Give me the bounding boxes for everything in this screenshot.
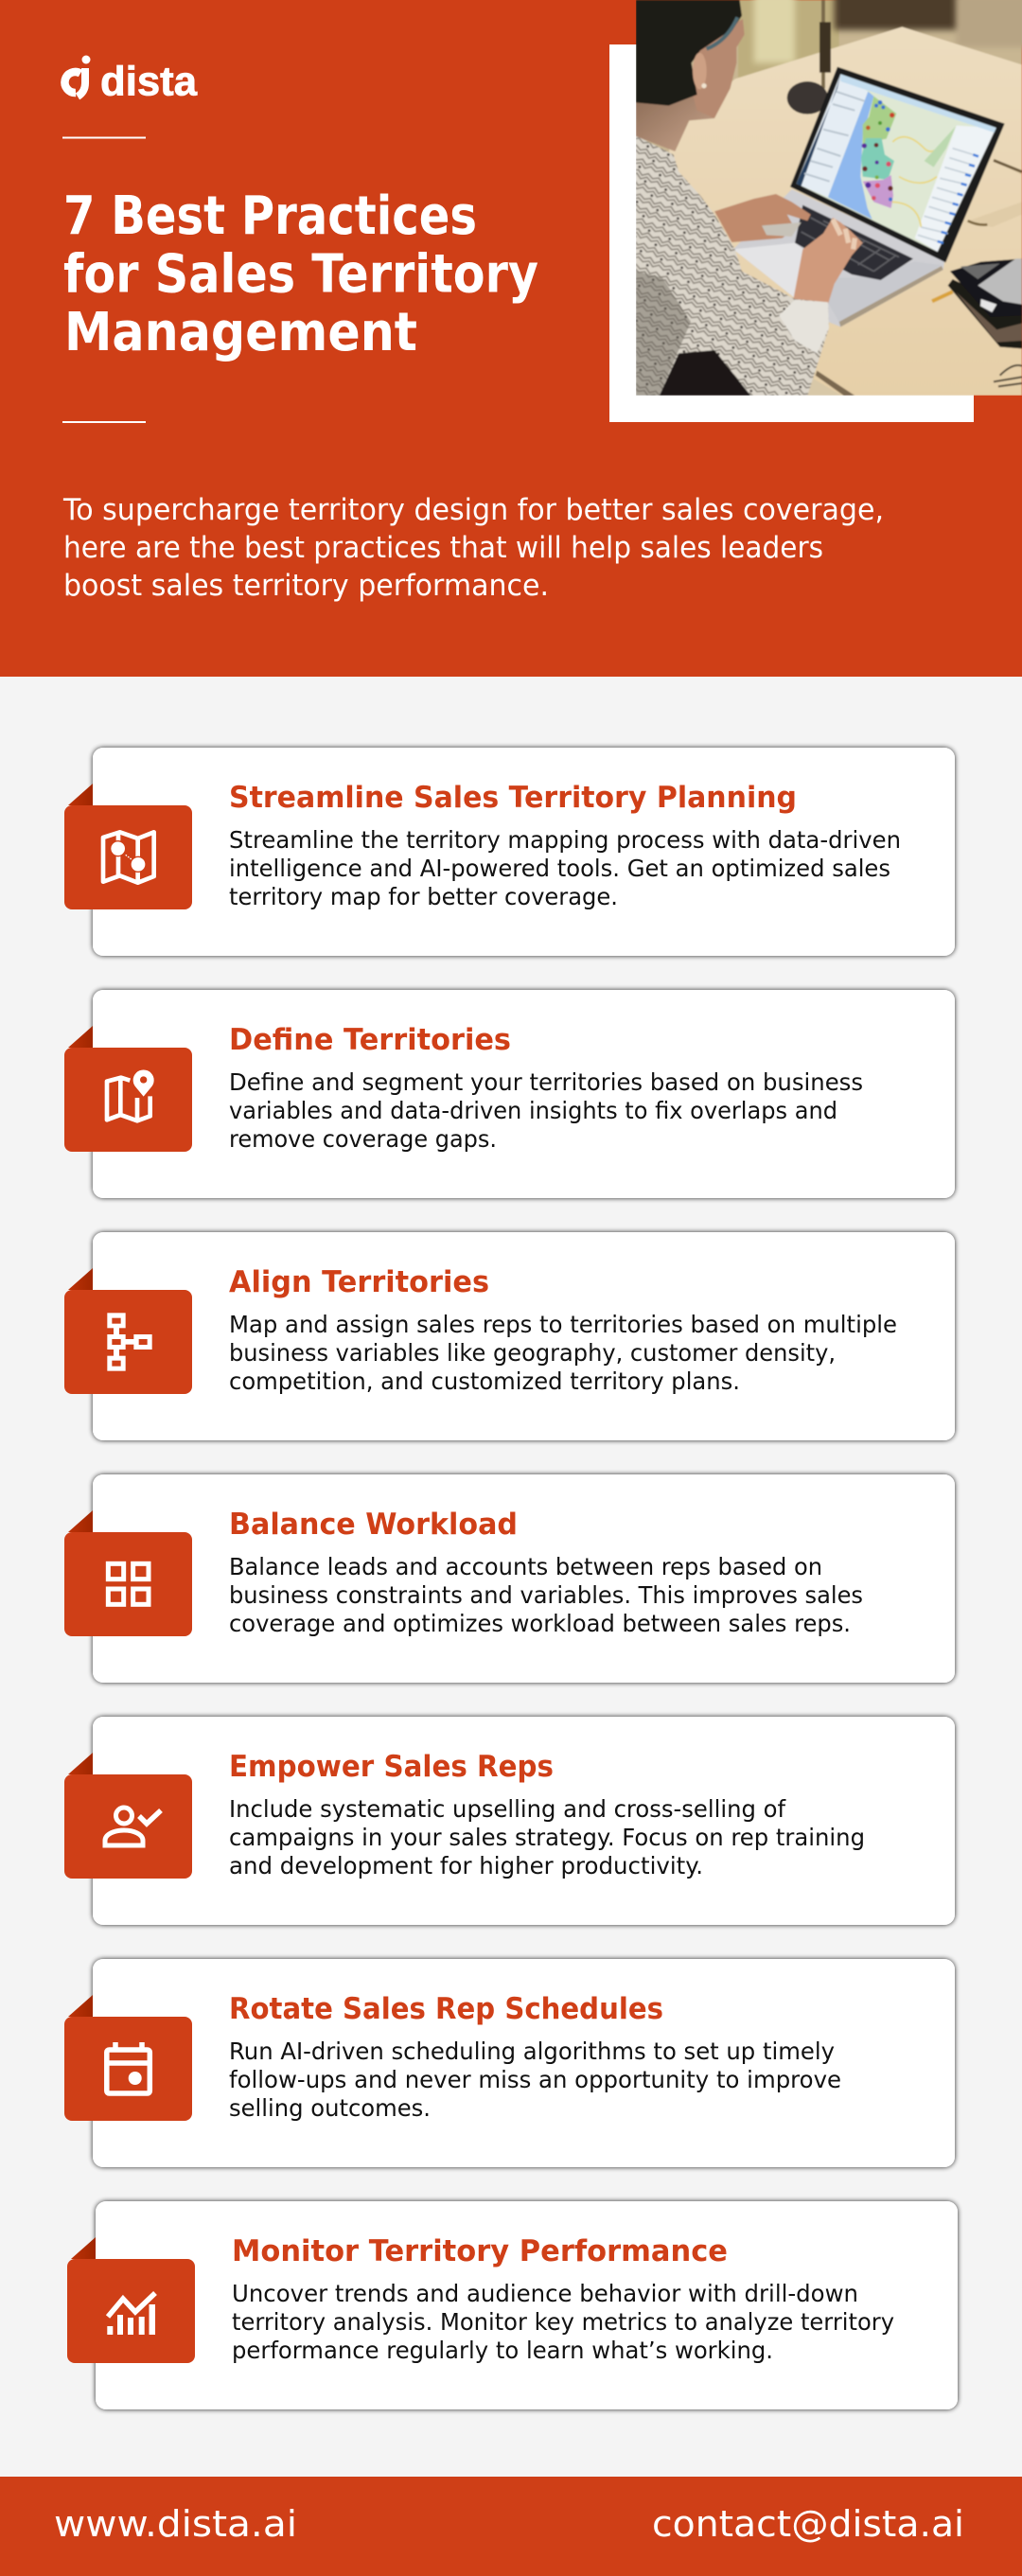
card 7: Monitor Territory Performance <box>67 2201 958 2409</box>
neck and face <box>636 90 714 151</box>
footer bar <box>0 2477 1022 2576</box>
icon box: chart <box>67 2237 195 2363</box>
body text: Include systematic upselling and cross-selling of <box>229 1795 786 1823</box>
body text: Run AI-driven scheduling algorithms to set up timely <box>229 2038 835 2065</box>
body text: remove coverage gaps. <box>229 1125 497 1153</box>
glasses <box>994 365 1022 386</box>
right hand and forearm <box>793 218 863 305</box>
intro text: here are the best practices that will help sales leaders <box>63 531 823 565</box>
body text: territory analysis. Monitor key metrics to analyze territory <box>232 2308 894 2336</box>
body text: business variables like geography, customer density, <box>229 1339 836 1367</box>
heading: Balance Workload <box>229 1508 518 1542</box>
territory markers <box>862 100 894 202</box>
hair <box>636 0 742 106</box>
body text: Streamline the territory mapping process with data-driven <box>229 826 901 854</box>
shirt body and sleeve <box>636 135 829 396</box>
heading: Empower Sales Reps <box>229 1750 554 1784</box>
card 1: Streamline Sales Territory Planning <box>64 748 955 956</box>
side panels <box>797 74 868 197</box>
side panel rows <box>918 149 978 243</box>
water <box>828 92 873 220</box>
screen <box>790 67 1005 262</box>
body text: competition, and customized territory plans. <box>229 1367 740 1395</box>
body text: Balance leads and accounts between reps based on <box>229 1553 822 1580</box>
header panel <box>0 0 1022 677</box>
card 5: Empower Sales Reps <box>64 1717 955 1925</box>
desk lower edge <box>816 371 855 396</box>
body text: selling outcomes. <box>229 2094 431 2122</box>
body text: Map and assign sales reps to territories based on multiple <box>229 1311 897 1338</box>
lamp <box>820 0 826 89</box>
body text <box>229 1311 897 1395</box>
body text <box>229 1068 863 1153</box>
title: Management <box>64 302 417 363</box>
body text: intelligence and AI-powered tools. Get an optimized sales <box>229 855 890 882</box>
laptop base <box>733 189 944 326</box>
body text: Define and segment your territories based on business <box>229 1068 863 1096</box>
body text <box>229 1795 865 1879</box>
title: for Sales Territory <box>63 244 538 305</box>
heading: Align Territories <box>229 1265 489 1299</box>
intro text <box>62 493 884 603</box>
email: contact@dista.ai <box>652 2503 964 2545</box>
white photo frame <box>609 44 974 422</box>
website: www.dista.ai <box>54 2503 297 2545</box>
intro text: To supercharge territory design for better sales coverage, <box>62 493 884 527</box>
body text: business constraints and variables. This improves sales <box>229 1581 863 1609</box>
heading: Monitor Territory Performance <box>232 2234 728 2268</box>
body text: campaigns in your sales strategy. Focus on rep training <box>229 1824 865 1851</box>
notebook and phone <box>948 279 1022 348</box>
territories <box>863 97 896 144</box>
body text: and development for higher productivity. <box>229 1852 703 1879</box>
title: 7 Best Practices <box>63 185 477 247</box>
body text: territory map for better coverage. <box>229 883 618 910</box>
card 4: Balance Workload <box>64 1474 955 1683</box>
logo: dista: dista <box>100 59 198 104</box>
heading: Streamline Sales Territory Planning <box>229 781 797 815</box>
body text <box>232 2280 894 2364</box>
icon box: calendar <box>64 1995 192 2121</box>
icon box: four squares <box>64 1510 192 1636</box>
body text: performance regularly to learn what’s working. <box>232 2337 773 2364</box>
heading: Define Territories <box>229 1023 511 1057</box>
card 2: Define Territories <box>64 990 955 1198</box>
logo: dista <box>64 55 198 104</box>
icon box: hierarchy <box>64 1268 192 1394</box>
roads on map <box>891 135 938 227</box>
body text <box>229 2038 841 2122</box>
icon box: map with connected points <box>64 784 192 909</box>
icon box: person with check <box>64 1753 192 1879</box>
body text: Uncover trends and audience behavior with drill-down <box>232 2280 858 2307</box>
card 6: Rotate Sales Rep Schedules <box>64 1959 955 2167</box>
body text <box>229 1553 863 1637</box>
heading: Rotate Sales Rep Schedules <box>229 1992 663 2026</box>
body text <box>229 826 901 910</box>
body text: coverage and optimizes workload between sales reps. <box>229 1610 851 1637</box>
card 3: Align Territories <box>64 1232 955 1440</box>
left hand <box>714 194 811 242</box>
icon box: map with pin <box>64 1026 192 1152</box>
body text: variables and data-driven insights to fix overlaps and <box>229 1097 837 1124</box>
title <box>63 185 538 363</box>
keyboard <box>795 205 913 280</box>
intro text: boost sales territory performance. <box>63 569 549 603</box>
body text: follow-ups and never miss an opportunity to improve <box>229 2066 841 2093</box>
photo: woman using laptop with territory map <box>636 0 1022 396</box>
